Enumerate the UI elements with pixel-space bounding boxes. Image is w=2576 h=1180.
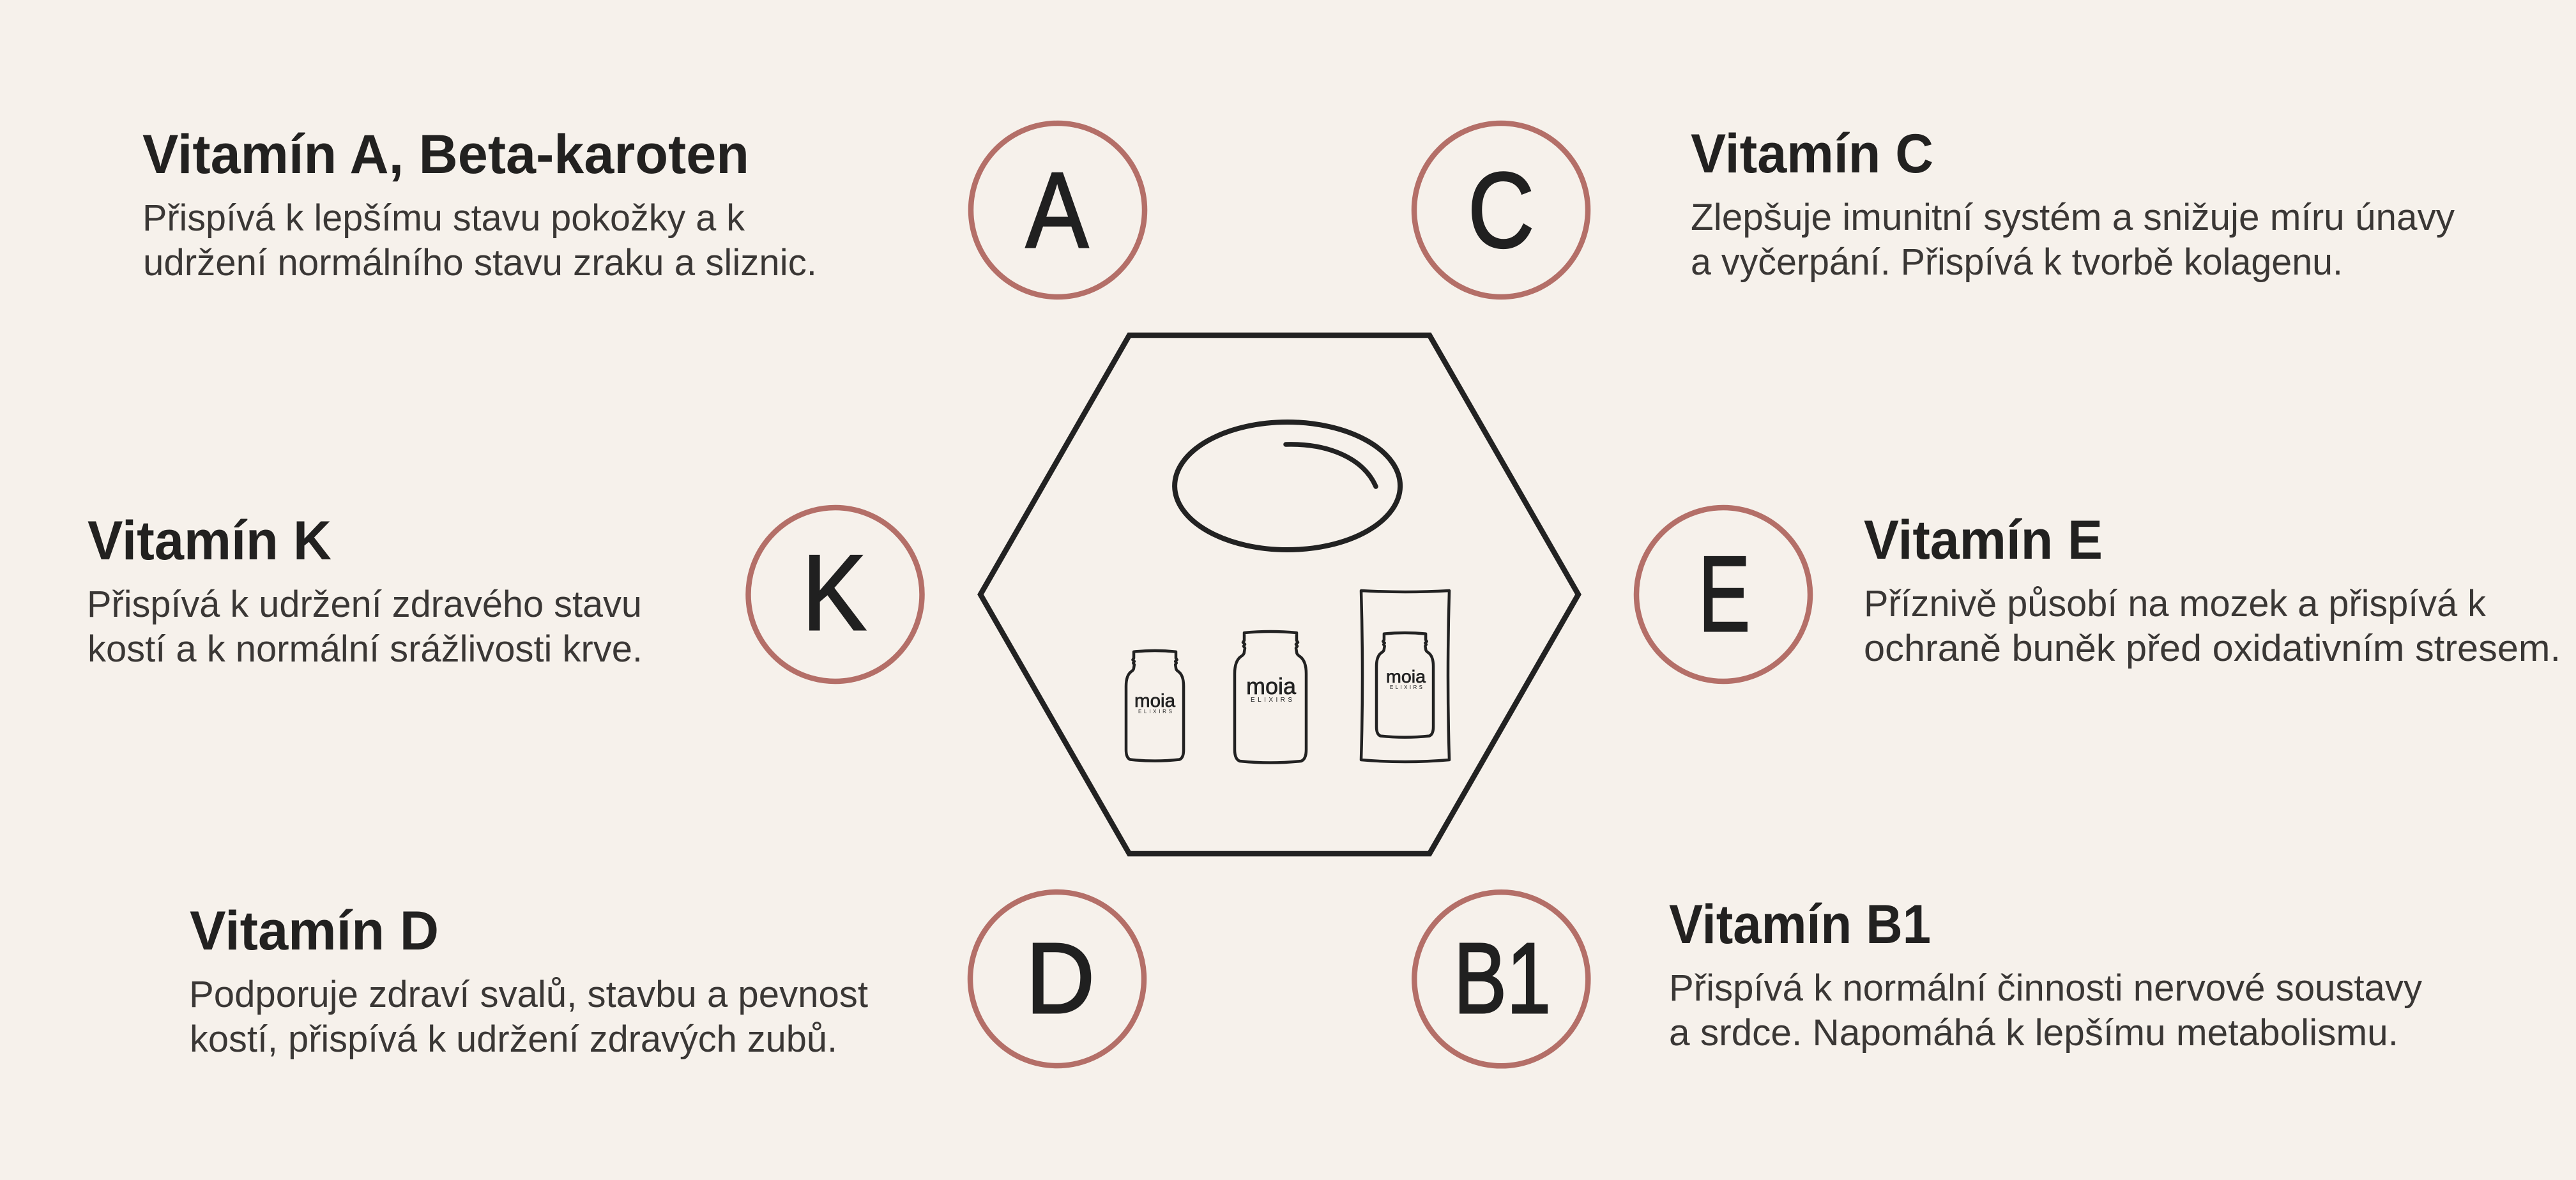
badge: E: E	[1698, 534, 1750, 654]
hexagon outline	[980, 335, 1578, 854]
icon: large bottle: ELIXIRS	[1251, 697, 1292, 704]
heading: Vitamín B1	[1669, 894, 1931, 955]
icon: pouch with bottle: ELIXIRS	[1390, 685, 1422, 690]
badge: B1	[1414, 892, 1588, 1066]
heading: Vitamín C	[1691, 123, 1933, 185]
description: Podporuje zdraví svalů, stavbu a pevnost	[189, 974, 868, 1015]
badge: K	[749, 508, 922, 681]
description	[142, 197, 817, 284]
badge: C: C	[1468, 150, 1534, 270]
icon: small bottle: moia	[1134, 691, 1176, 711]
badge: C	[1414, 123, 1588, 297]
description: a vyčerpání. Přispívá k tvorbě kolagenu.	[1691, 241, 2343, 283]
text block: Vitamin C	[1691, 123, 2455, 283]
icon: pouch with bottle	[1361, 591, 1449, 762]
badge: D	[970, 892, 1144, 1066]
description: Přispívá k normální činnosti nervové soustavy	[1669, 967, 2422, 1009]
text block: Vitamin D	[189, 900, 868, 1060]
icon: small bottle: ELIXIRS	[1138, 709, 1172, 715]
text block: Vitamin E	[1864, 510, 2561, 669]
text block: Vitamin A	[142, 124, 817, 284]
description: Přispívá k lepšímu stavu pokožky a k	[142, 197, 745, 239]
badge: B1: B1	[1454, 923, 1551, 1034]
description	[189, 974, 868, 1060]
icon: softgel capsule	[1175, 422, 1400, 550]
icon: large bottle: moia	[1246, 673, 1297, 699]
description: udržení normálního stavu zraku a sliznic.	[143, 242, 817, 284]
heading: Vitamín K	[88, 510, 332, 571]
badge: A	[971, 123, 1145, 297]
icon: pouch with bottle: moia	[1386, 667, 1426, 686]
description	[1864, 583, 2561, 669]
heading: Vitamín D	[190, 900, 439, 962]
description	[1669, 967, 2422, 1054]
description	[87, 584, 643, 670]
description: ochraně buněk před oxidativním stresem.	[1864, 628, 2561, 669]
heading: Vitamín E	[1864, 510, 2103, 571]
heading: Vitamín A, Beta-karoten	[142, 124, 749, 185]
central hexagon with product icons	[980, 335, 1578, 854]
description: Příznivě působí na mozek a přispívá k	[1864, 583, 2487, 624]
text block: Vitamin B1	[1669, 894, 2422, 1054]
badge: E	[1636, 508, 1810, 681]
description: Přispívá k udržení zdravého stavu	[87, 584, 642, 625]
badge: K: K	[802, 533, 866, 653]
text block: Vitamin K	[87, 510, 643, 670]
description	[1691, 197, 2455, 283]
icon: large bottle	[1235, 632, 1306, 762]
badge: A: A	[1026, 150, 1088, 270]
description: a srdce. Napomáhá k lepšímu metabolismu.	[1669, 1012, 2398, 1054]
icon: small bottle	[1126, 651, 1184, 761]
badge: D: D	[1026, 923, 1095, 1034]
description: kostí, přispívá k udržení zdravých zubů.	[190, 1018, 837, 1060]
description: Zlepšuje imunitní systém a snižuje míru únavy	[1691, 197, 2455, 238]
description: kostí a k normální srážlivosti krve.	[88, 628, 643, 670]
